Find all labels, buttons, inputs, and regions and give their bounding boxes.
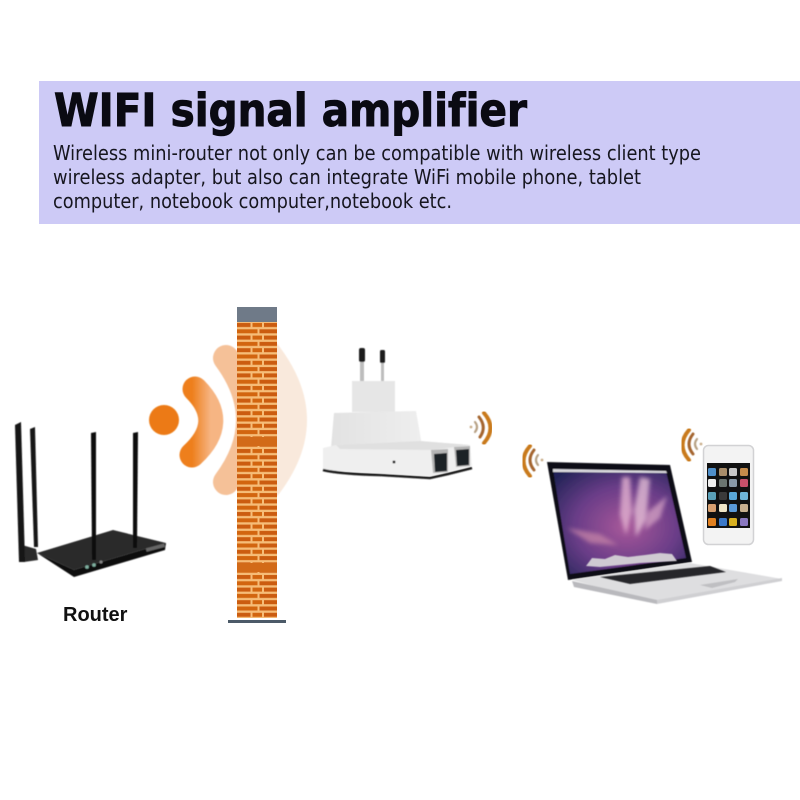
description text: computer, notebook computer,notebook etc. — [53, 189, 452, 213]
router label: Router — [63, 604, 128, 626]
app icons — [708, 468, 748, 526]
wifi icon: laptop — [524, 446, 543, 476]
header panel — [39, 81, 800, 224]
signal waves through wall — [149, 335, 307, 505]
phone — [704, 446, 754, 544]
description text: Wireless mini-router not only can be compatible with wireless client type — [53, 141, 701, 165]
title: WIFI signal amplifier — [54, 84, 528, 137]
wifi icon: repeater — [470, 413, 490, 443]
wifi icon: phone — [682, 430, 702, 460]
description text: wireless adapter, but also can integrate WiFi mobile phone, tablet — [53, 165, 641, 189]
router — [15, 422, 166, 577]
description text — [53, 141, 701, 213]
brick wall — [228, 307, 286, 623]
wifi repeater plug — [323, 348, 472, 478]
laptop — [547, 462, 782, 604]
